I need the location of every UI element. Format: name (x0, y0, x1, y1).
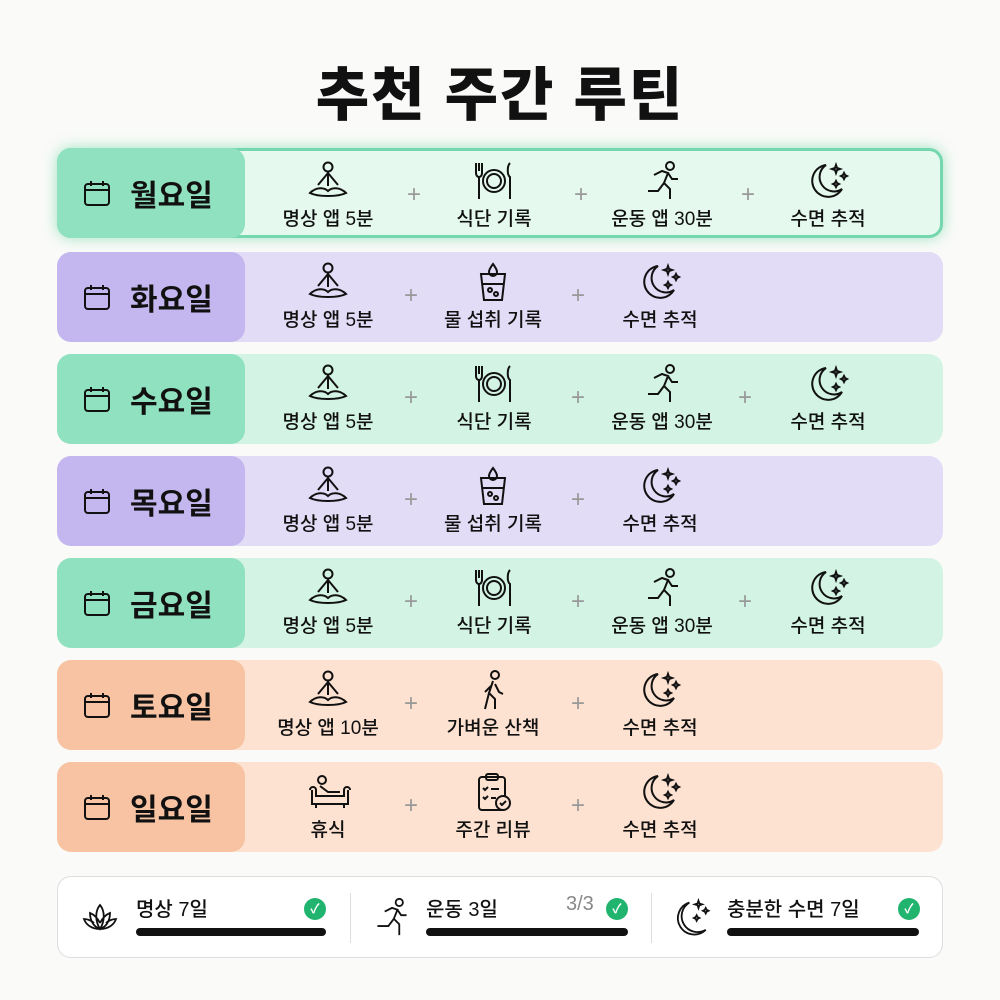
summary panel (57, 876, 943, 958)
item: meditation (277, 670, 379, 739)
item: meditation: 명상 앱 5분 (282, 209, 374, 230)
item: meditation: 명상 앱 5분 (282, 616, 374, 637)
summary: exercise: 운동 3일 (426, 899, 498, 921)
item: exercise: 운동 앱 30분 (611, 209, 713, 230)
item: meditation (282, 162, 374, 230)
item: water (444, 466, 542, 535)
item: rest: 휴식 (311, 820, 345, 841)
row: tuesday (57, 252, 943, 342)
row: tuesday: + (571, 282, 585, 309)
item: sleep (790, 365, 866, 433)
row: thursday: + (571, 486, 585, 513)
day label (57, 660, 245, 750)
item: sleep: 수면 추적 (622, 820, 698, 841)
row: monday: + (741, 181, 755, 208)
item: water: 물 섭취 기록 (444, 514, 542, 535)
item: meditation: 명상 앱 5분 (282, 310, 374, 331)
row: friday: + (404, 588, 418, 615)
row: sunday: + (571, 792, 585, 819)
row: wednesday: + (404, 384, 418, 411)
day label: 금요일 (130, 590, 213, 623)
item: water: 물 섭취 기록 (444, 310, 542, 331)
item: walk: 가벼운 산책 (447, 718, 539, 739)
item: sleep (622, 467, 698, 535)
row: friday (57, 558, 943, 648)
item: meditation (282, 262, 374, 331)
item: sleep (622, 773, 698, 841)
day label: 수요일 (130, 386, 213, 419)
item: sleep (622, 263, 698, 331)
row: thursday (57, 456, 943, 546)
row: friday: + (738, 588, 752, 615)
item: exercise: 운동 앱 30분 (611, 616, 713, 637)
item: weekly review: 주간 리뷰 (455, 820, 531, 841)
item: exercise: 운동 앱 30분 (611, 412, 713, 433)
day label: 화요일 (130, 284, 213, 317)
summary: sleep: 충분한 수면 7일 (727, 899, 860, 921)
day label (57, 762, 245, 852)
item: diet: 식단 기록 (456, 412, 532, 433)
item: sleep: 수면 추적 (622, 718, 698, 739)
summary: meditation (82, 898, 326, 936)
row: saturday: + (404, 690, 418, 717)
item: walk (447, 670, 539, 739)
day label (57, 354, 245, 444)
item: rest (309, 775, 351, 841)
summary: exercise (377, 893, 628, 936)
item: exercise (611, 364, 713, 433)
day label (57, 456, 245, 546)
item: meditation (282, 466, 374, 535)
item: sleep (622, 671, 698, 739)
day label: 월요일 (130, 180, 213, 213)
summary: meditation: 명상 7일 (136, 899, 208, 921)
item: diet (456, 569, 532, 637)
item: sleep: 수면 추적 (622, 514, 698, 535)
day label (57, 252, 245, 342)
row: monday (57, 148, 943, 238)
item: diet (456, 162, 532, 230)
item: diet (456, 365, 532, 433)
day label: 일요일 (130, 794, 213, 827)
row: saturday (57, 660, 943, 750)
item: meditation: 명상 앱 5분 (282, 514, 374, 535)
summary: exercise: 3/3 (566, 893, 594, 915)
summary: exercise: ✓ (612, 901, 622, 916)
summary: meditation: ✓ (310, 901, 320, 916)
item: meditation (282, 568, 374, 637)
item: sleep: 수면 추적 (790, 412, 866, 433)
day label: 목요일 (130, 488, 213, 521)
summary: sleep (676, 898, 920, 936)
item: diet: 식단 기록 (456, 209, 532, 230)
item: exercise (611, 568, 713, 637)
item: meditation (282, 364, 374, 433)
item: sleep: 수면 추적 (622, 310, 698, 331)
row: wednesday: + (571, 384, 585, 411)
row: thursday: + (404, 486, 418, 513)
day label (57, 148, 245, 238)
row: sunday (57, 762, 943, 852)
row: monday: + (407, 181, 421, 208)
summary: sleep: ✓ (904, 901, 914, 916)
row: tuesday: + (404, 282, 418, 309)
title: 추천 주간 루틴 (316, 63, 684, 128)
item: meditation: 명상 앱 10분 (277, 718, 379, 739)
item: sleep: 수면 추적 (790, 616, 866, 637)
item: meditation: 명상 앱 5분 (282, 412, 374, 433)
row: friday: + (571, 588, 585, 615)
item: water (444, 262, 542, 331)
day label: 토요일 (130, 692, 213, 725)
item: exercise (611, 161, 713, 230)
item: sleep: 수면 추적 (790, 209, 866, 230)
row: saturday: + (571, 690, 585, 717)
row: monday: + (574, 181, 588, 208)
item: sleep (790, 569, 866, 637)
item: diet: 식단 기록 (456, 616, 532, 637)
row: wednesday: + (738, 384, 752, 411)
row: wednesday (57, 354, 943, 444)
item: weekly review (455, 773, 531, 841)
item: sleep (790, 162, 866, 230)
day label (57, 558, 245, 648)
row: sunday: + (404, 792, 418, 819)
